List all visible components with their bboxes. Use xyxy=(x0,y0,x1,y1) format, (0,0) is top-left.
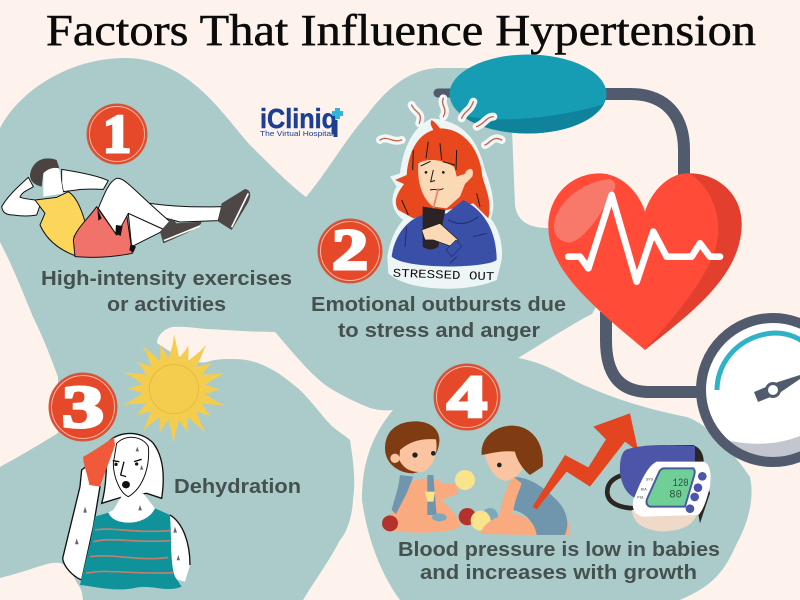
badge 1 xyxy=(87,104,147,164)
text: factor 4: Blood pressure is low in babies xyxy=(398,539,720,561)
illustration: stressed girl sticker: STRESSED OUT xyxy=(393,267,495,284)
icon: heart with pulse line xyxy=(548,173,742,350)
text: factor 1 xyxy=(41,268,292,316)
badge 3 xyxy=(49,373,117,441)
illustration: sun xyxy=(121,334,227,444)
illustration: stressed girl sticker xyxy=(380,98,502,289)
icon: inflation bulb xyxy=(450,54,606,134)
badge 1: 1 xyxy=(103,104,131,164)
title: Factors That Influence Hypertension xyxy=(46,6,756,55)
badge 2 xyxy=(318,217,382,283)
text: factor 4: and increases with growth xyxy=(420,562,697,584)
logo: iCliniq: iCliniq xyxy=(260,103,337,134)
blood pressure device: tubes xyxy=(438,93,720,392)
illustration: sweating woman with cloth xyxy=(63,433,190,589)
badge 4: 4 xyxy=(447,364,487,430)
illustration: blood pressure monitor: SYS xyxy=(646,478,654,482)
icon: pressure gauge xyxy=(700,317,800,463)
badge 4 xyxy=(434,364,500,430)
text: factor 1: High-intensity exercises xyxy=(41,268,292,290)
text: factor 3: Dehydration xyxy=(174,476,301,498)
logo: iCliniq: The Virtual Hospital xyxy=(260,129,333,138)
illustration: blood pressure monitor: DIA xyxy=(641,488,647,492)
badge 3: 3 xyxy=(62,374,104,440)
illustration: babies playing xyxy=(382,413,638,535)
text: factor 2 xyxy=(311,294,566,342)
text: factor 4 xyxy=(398,539,720,584)
text: factor 2: to stress and anger xyxy=(338,320,540,342)
illustration: man doing sit-ups xyxy=(2,158,250,257)
text: factor 2: Emotional outbursts due xyxy=(311,294,566,316)
badge 2: 2 xyxy=(332,217,368,282)
text: factor 1: or activities xyxy=(107,294,226,316)
illustration: blood pressure monitor: 120 xyxy=(673,478,689,490)
illustration: blood pressure monitor: 80 xyxy=(669,489,682,501)
illustration: blood pressure monitor xyxy=(607,445,711,532)
illustration: blood pressure monitor: PUL xyxy=(637,496,644,500)
